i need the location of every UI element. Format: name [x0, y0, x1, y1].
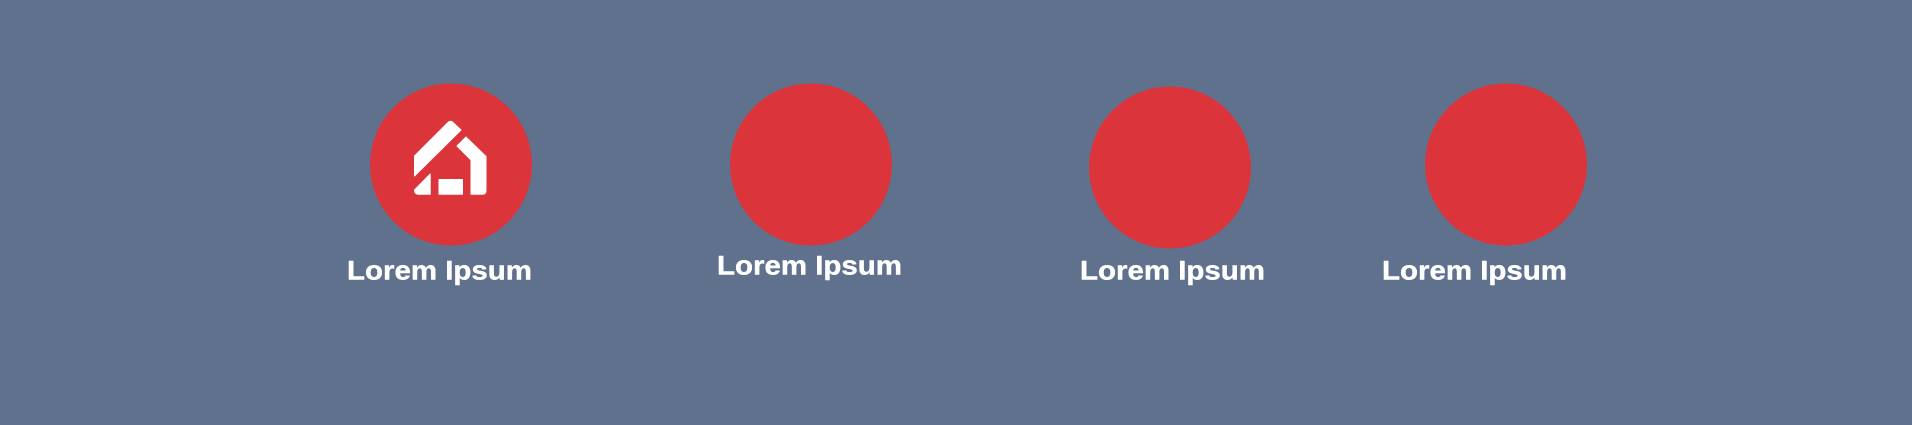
label 2: Lorem Ipsum [717, 250, 902, 280]
red circle 1 [370, 84, 532, 246]
label 1: Lorem Ipsum [347, 256, 532, 286]
label 4: Lorem Ipsum [1382, 256, 1567, 286]
item 3: circle and label [1080, 86, 1265, 286]
icon: house [414, 121, 486, 194]
item 2: circle and label [717, 84, 902, 280]
red circle 3 [1089, 86, 1251, 248]
red circle 2 [730, 84, 892, 246]
red circle 4 [1425, 84, 1587, 246]
item 1: house icon circle and label [347, 84, 532, 286]
item 4: circle and label [1382, 84, 1587, 286]
label 3: Lorem Ipsum [1080, 256, 1265, 286]
